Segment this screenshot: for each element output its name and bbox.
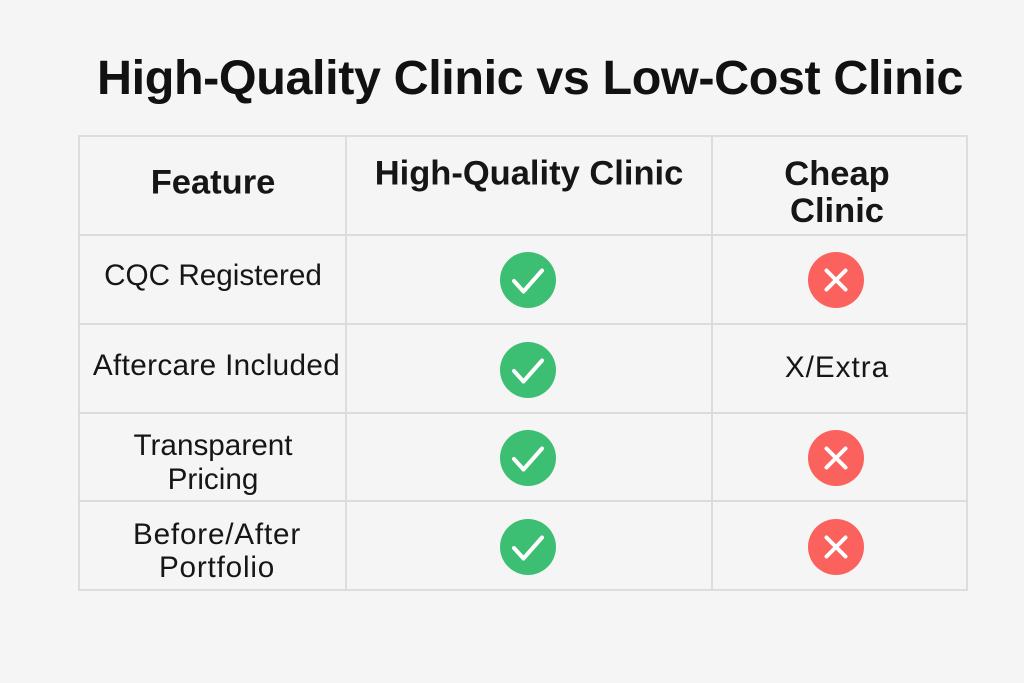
icon: green check row 2 (500, 342, 556, 398)
icon: red cross row 3 (808, 430, 864, 486)
icon: green check row 4 (500, 519, 556, 575)
icon: red cross row 1 (808, 252, 864, 308)
icon: green check row 1 (500, 252, 556, 308)
header: feature: Feature (151, 164, 275, 202)
title: High-Quality Clinic vs Low-Cost Clinic (97, 51, 963, 105)
header: cheap clinic: Clinic (790, 192, 884, 230)
header: cheap clinic: Cheap (784, 155, 890, 193)
row label: aftercare included: Aftercare Included (93, 349, 340, 382)
row label: CQC registered: CQC Registered (104, 259, 322, 292)
icon: red cross row 4 (808, 519, 864, 575)
row label: transparent pricing (134, 429, 292, 496)
cell text: X/Extra: X/Extra (785, 351, 889, 384)
row label: before/after portfolio (133, 518, 301, 584)
header: high-quality clinic: High-Quality Clinic (375, 154, 683, 192)
row label: before/after portfolio: Portfolio (159, 551, 275, 584)
icon: green check row 3 (500, 430, 556, 486)
header: cheap clinic (784, 155, 890, 230)
row label: before/after portfolio: Before/After (133, 518, 301, 551)
row label: transparent pricing: Transparent (134, 429, 292, 462)
row label: transparent pricing: Pricing (168, 463, 258, 496)
